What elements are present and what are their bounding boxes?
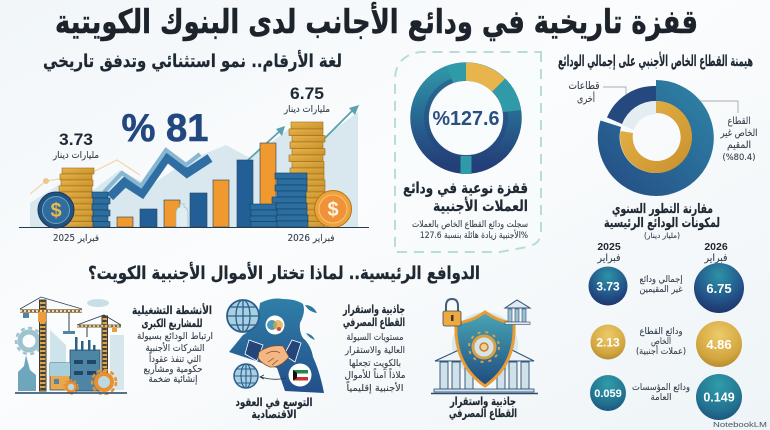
illustration: shield and bank	[431, 299, 538, 394]
icon: orange gear large	[92, 370, 116, 394]
icon: orange gear small	[64, 380, 78, 394]
icon: blue dollar coin: $	[50, 200, 62, 222]
bubble 2.13: 2.13	[596, 336, 620, 350]
text block: major project operations: للمشاريع الكبرى	[142, 316, 202, 330]
double ring chart	[598, 80, 714, 196]
value 3.73: 3.73	[59, 130, 93, 149]
donut chart	[420, 62, 521, 174]
icon: Kuwait flag badge	[288, 364, 312, 386]
row label: total non-resident deposits: إجمالي ودائع	[640, 275, 682, 285]
text block: major project operations: التي تنفذ عقوداً	[149, 352, 201, 365]
panel: numbers chart	[19, 50, 369, 244]
column header 2025	[597, 241, 621, 264]
text block: banking stability: بالكويت تجعلها	[349, 358, 401, 369]
icon: orange dollar coin: $	[327, 199, 339, 221]
unit note: (مليار دينار)	[644, 231, 680, 240]
section heading: main drivers: الدوافع الرئيسية.. لماذا تختار الأموال الأجنبية الكويت؟	[88, 262, 480, 284]
comparison heading line two: لمكونات الودائع الرئيسية	[604, 216, 720, 231]
pale trend line	[30, 160, 140, 194]
icon: pale gear	[16, 328, 42, 354]
chart background mountains	[30, 112, 358, 227]
arrow between globe and map	[260, 375, 286, 379]
label: non-resident private sector: المقيم	[727, 140, 751, 151]
label: other sectors: أخرى	[577, 91, 595, 105]
tall crane	[20, 297, 82, 391]
bubble 3.73	[588, 266, 628, 306]
icon: small bank	[505, 300, 530, 324]
bubble 6.75: 6.75	[706, 281, 732, 296]
right gold coin stack	[289, 122, 325, 227]
text block: banking stability: ملاذاً آمناً للأموال	[344, 368, 406, 381]
column header 2026	[704, 241, 728, 264]
small white flask	[176, 204, 188, 227]
row label: public institutions deposits	[632, 383, 690, 403]
icon: big globe	[227, 300, 259, 332]
ground line	[15, 392, 127, 394]
caption: banking sector attractiveness: القطاع المصرفي	[449, 406, 517, 420]
baseline axis	[19, 226, 369, 228]
date 2025: فبراير 2025	[53, 233, 99, 244]
icon: padlock	[443, 299, 461, 326]
panel heading line two: العملات الأجنبية	[433, 197, 528, 215]
text block: banking stability: الأجنبية إقليمياً	[346, 381, 404, 394]
bubble 2.13	[590, 324, 626, 360]
illustration: construction cranes	[15, 297, 127, 394]
bubble 4.86: 4.86	[706, 337, 732, 352]
icon: network badge	[266, 316, 284, 334]
donut value: %127.6	[432, 108, 500, 130]
panel body line one: سجلت ودائع القطاع الخاص بالعملات	[412, 220, 528, 230]
left gold coin stack	[59, 168, 94, 227]
icon: orange dollar coin	[314, 190, 352, 228]
row label: private sector deposits: (عملات أجنبية)	[636, 345, 686, 357]
heading: language of numbers: لغة الأرقام.. نمو استثنائي وتدفق تاريخي	[43, 50, 342, 72]
bubble 0.059	[590, 375, 626, 411]
shield	[456, 312, 514, 386]
text block: banking stability: مستويات السيولة	[346, 332, 404, 343]
column header 2026: 2026	[704, 241, 728, 253]
bubble 0.059: 0.059	[594, 388, 622, 400]
caption: banking sector attractiveness	[449, 394, 517, 420]
row label: total non-resident deposits	[640, 275, 683, 295]
panel: annual comparison	[588, 202, 744, 420]
panel body line two: الأجنبية زيادة هائلة بنسبة 127.6%	[420, 229, 528, 241]
growth arrow one	[248, 126, 285, 160]
column header 2026: فبراير	[704, 253, 728, 264]
column header 2025: فبراير	[597, 253, 621, 264]
row label: total non-resident deposits: غير المقيمين	[640, 285, 683, 295]
text block: banking stability: العالية والاستقرار	[344, 345, 405, 356]
unit label 2026: مليارات دينار	[283, 104, 330, 115]
halo	[452, 312, 518, 378]
icon: handshake	[245, 340, 301, 367]
text block: banking stability	[342, 302, 406, 394]
label: non-resident private sector: (%80.4)	[722, 153, 756, 163]
orange small building	[50, 363, 70, 390]
text block: major project operations: حكومية ومشاريع	[144, 364, 203, 375]
zigzag band	[104, 150, 210, 197]
blue map shape	[229, 298, 324, 393]
text block: major project operations: ارتباط الودائع بسيولة	[137, 331, 213, 342]
row label: private sector deposits: الخاص	[651, 337, 671, 347]
caption: contract expansion	[236, 395, 312, 421]
bubble 0.149	[696, 374, 742, 420]
comparison heading line one: مقارنة التطور السنوي	[612, 202, 713, 217]
bubble 3.73: 3.73	[596, 280, 620, 294]
bubble 4.86	[696, 321, 742, 367]
small islands	[305, 305, 317, 340]
text block: major project operations: إنشائية ضخمة	[148, 374, 198, 385]
text block: major project operations	[132, 303, 213, 385]
text block: major project operations: الشركات الأجنبية	[146, 342, 204, 354]
column header 2025: 2025	[597, 241, 621, 253]
center building	[70, 337, 100, 391]
growth arrow two	[325, 105, 359, 138]
right blue coin stack	[272, 173, 308, 227]
caption: contract expansion: الاقتصادية	[252, 407, 296, 421]
value 6.75: 6.75	[290, 84, 324, 103]
text block: banking stability: القطاع المصرفي	[343, 315, 405, 329]
row label: public institutions deposits: العامة	[650, 393, 672, 403]
icon: ship wheel	[469, 332, 499, 362]
label: other sectors: قطاعات	[568, 80, 600, 92]
panel: currency deposit jump	[395, 52, 541, 252]
small blue coin stack	[250, 204, 277, 227]
icon: blue dollar coin	[38, 192, 74, 228]
temple base	[431, 349, 538, 394]
caption: banking sector attractiveness: جاذبية واستقرار	[449, 394, 516, 409]
panel: private sector dominance	[558, 52, 758, 196]
row label: private sector deposits	[636, 327, 686, 357]
row label: public institutions deposits: ودائع المؤسسات	[632, 383, 690, 393]
bubble 6.75	[694, 263, 744, 313]
illustration: handshake and Kuwait map	[227, 298, 324, 393]
unit label 2025: مليارات دينار	[52, 150, 99, 161]
icon: small globe	[234, 364, 258, 388]
bubble 0.149: 0.149	[703, 390, 735, 404]
caption: contract expansion: التوسع في العقود	[236, 395, 312, 410]
text block: banking stability: جاذبية واستقرار	[342, 302, 405, 317]
light buildings backdrop	[50, 330, 124, 390]
watermark: NotebookLM: NotebookLM	[713, 422, 767, 429]
bars	[117, 143, 276, 227]
label: non-resident private sector: القطاع	[728, 116, 750, 127]
label: non-resident private sector	[700, 101, 758, 163]
date 2026: فبراير 2026	[288, 233, 334, 244]
text block: major project operations: الأنشطة التشغيلية	[132, 303, 212, 317]
factory silhouette	[18, 355, 36, 391]
big percent: % 81	[122, 107, 208, 150]
trend dot	[43, 178, 49, 184]
left blue coin stack	[92, 192, 110, 227]
label: other sectors	[568, 80, 626, 105]
panel heading line one: قفزة نوعية في ودائع	[403, 179, 528, 197]
dashed frame	[395, 52, 541, 252]
cloud	[87, 299, 109, 307]
label: non-resident private sector: الخاص غير	[720, 128, 758, 139]
short crane	[77, 315, 121, 391]
row label: private sector deposits: ودائع القطاع	[640, 327, 682, 337]
